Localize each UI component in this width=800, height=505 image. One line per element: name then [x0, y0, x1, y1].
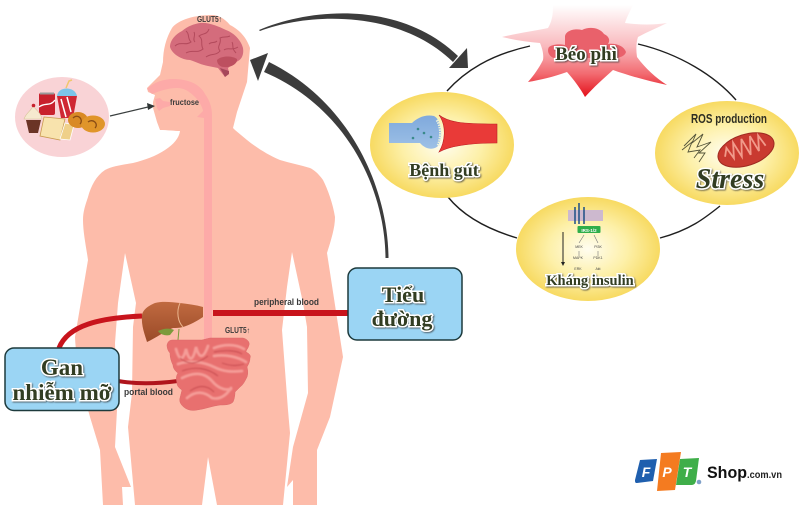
node: Bệnh gút	[370, 92, 514, 198]
connector: peripheral blood	[213, 310, 348, 316]
logo: FPT Shop: P	[662, 464, 672, 480]
node: Kháng insulin: Kháng insulin	[546, 273, 634, 289]
digestive tract	[147, 79, 212, 345]
icon: liver	[142, 302, 203, 342]
icon: bread	[40, 117, 74, 140]
box: Tiểu đường	[348, 268, 462, 340]
node: Béo phì: Béo phì	[555, 44, 617, 65]
arrow: diabetes to brain	[250, 53, 388, 258]
icon: insulin pathway: MEK	[575, 245, 583, 249]
logo: FPT Shop: .com.vn	[747, 470, 782, 481]
logo: FPT Shop: Shop	[707, 463, 747, 482]
icon: insulin pathway: IRS-1/2	[581, 228, 597, 233]
icon: mitochondrion	[714, 126, 778, 174]
node: Kháng insulin	[516, 197, 660, 301]
label: GLUT5 intestine: GLUT5↑	[225, 326, 250, 335]
icon: insulin pathway: PI3K	[594, 245, 602, 249]
logo: FPT Shop: T	[683, 464, 693, 480]
node: Bệnh gút: Bệnh gút	[409, 160, 479, 180]
arrow: food to mouth	[110, 103, 155, 116]
food circle	[15, 77, 109, 157]
icon: brain	[170, 23, 243, 77]
icon: intestines	[167, 338, 250, 410]
icon: insulin pathway	[561, 203, 603, 271]
icon: drink cup	[57, 80, 77, 118]
body silhouette	[75, 15, 343, 505]
logo: FPT Shop: F	[642, 464, 651, 480]
node: Stress: Stress	[696, 164, 764, 195]
icon: lightning	[682, 134, 711, 162]
arrow: brain to cycle	[259, 13, 468, 68]
icon: insulin pathway: ERK	[574, 267, 582, 271]
connector: portal blood	[118, 381, 178, 383]
icon: joint	[389, 115, 497, 152]
label: GLUT5 brain: GLUT5↑	[197, 14, 222, 24]
box: Gan nhiễm mỡ: Gan	[41, 355, 83, 380]
box: Gan nhiễm mỡ: nhiễm mỡ	[12, 380, 112, 405]
node: Béo phì	[502, 0, 667, 97]
icon: insulin pathway: Akt	[595, 267, 601, 271]
cycle ring	[447, 44, 736, 238]
connector: liver to fatty liver box	[59, 316, 142, 348]
icon: pastries	[68, 112, 105, 132]
label: peripheral blood: peripheral blood	[254, 297, 319, 308]
logo: FPT Shop	[635, 452, 782, 491]
box: Gan nhiễm mỡ	[5, 348, 119, 410]
box: Tiểu đường: Tiểu	[382, 282, 424, 307]
node: Stress	[655, 101, 799, 205]
box: Tiểu đường: đường	[372, 306, 432, 331]
icon: insulin pathway: PDK1	[593, 256, 603, 260]
label: portal blood: portal blood	[124, 387, 173, 398]
icon: cupcake	[24, 104, 42, 133]
icon: soda can	[39, 92, 55, 115]
node: Stress: ROS production	[691, 111, 767, 126]
label: fructose: fructose	[170, 97, 199, 107]
icon: insulin pathway: MAPK	[573, 256, 584, 260]
